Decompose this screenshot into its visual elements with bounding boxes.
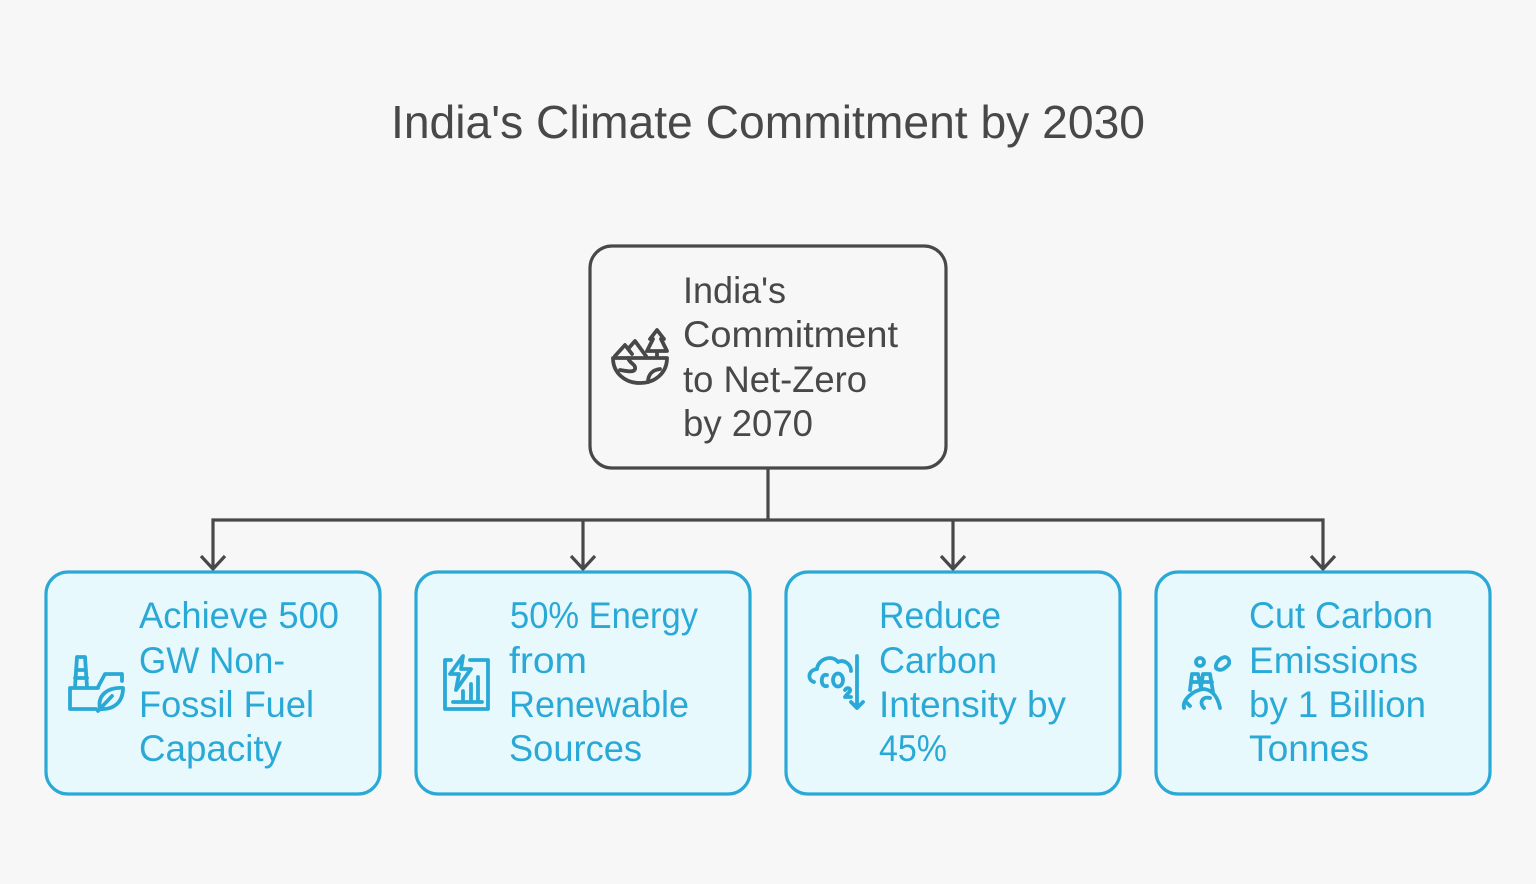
text: carbon intensity: Carbon bbox=[879, 640, 997, 681]
text: 50% energy: Renewable bbox=[509, 684, 689, 725]
text: cut carbon emissions: Cut Carbon bbox=[1249, 595, 1433, 636]
text: carbon intensity: Intensity by bbox=[879, 684, 1066, 725]
icon: earth with mountains and tree bbox=[613, 330, 667, 383]
title: India's Climate Commitment by 2030 bbox=[391, 96, 1145, 148]
text: cut carbon emissions: Tonnes bbox=[1249, 728, 1369, 769]
text: India's commitment: to Net-Zero bbox=[683, 359, 867, 400]
text: cut carbon emissions: Emissions bbox=[1249, 640, 1418, 681]
text: 50% energy: Sources bbox=[509, 728, 642, 769]
icon: CO2 cloud with down arrow bbox=[809, 656, 863, 708]
panel: carbon intensity bbox=[786, 572, 1120, 794]
text: carbon intensity: Reduce bbox=[879, 595, 1001, 636]
text: 500 GW non-fossil: Fossil Fuel bbox=[139, 684, 314, 725]
text: India's commitment: India's bbox=[683, 270, 786, 311]
panel: cut carbon emissions bbox=[1156, 572, 1490, 794]
text: carbon intensity: 45% bbox=[879, 728, 947, 769]
text: cut carbon emissions: by 1 Billion bbox=[1249, 684, 1426, 725]
connector arrows bbox=[201, 468, 1335, 569]
panel: India's commitment bbox=[590, 246, 946, 468]
icon: document with bolt and bars bbox=[445, 656, 488, 709]
panel: 50% energy bbox=[416, 572, 750, 794]
text: India's commitment: by 2070 bbox=[683, 403, 813, 444]
icon: factory with leaf bbox=[70, 657, 123, 711]
text: 500 GW non-fossil: Capacity bbox=[139, 728, 282, 769]
text: India's commitment: Commitment bbox=[683, 314, 899, 355]
text: 50% energy: from bbox=[509, 640, 587, 681]
text: 500 GW non-fossil: Achieve 500 bbox=[139, 595, 339, 636]
text: 500 GW non-fossil: GW Non- bbox=[139, 640, 285, 681]
panel: 500 GW non-fossil bbox=[46, 572, 380, 794]
icon: factory on globe with smoke bbox=[1184, 657, 1229, 708]
text: 50% energy: 50% Energy bbox=[510, 595, 698, 636]
